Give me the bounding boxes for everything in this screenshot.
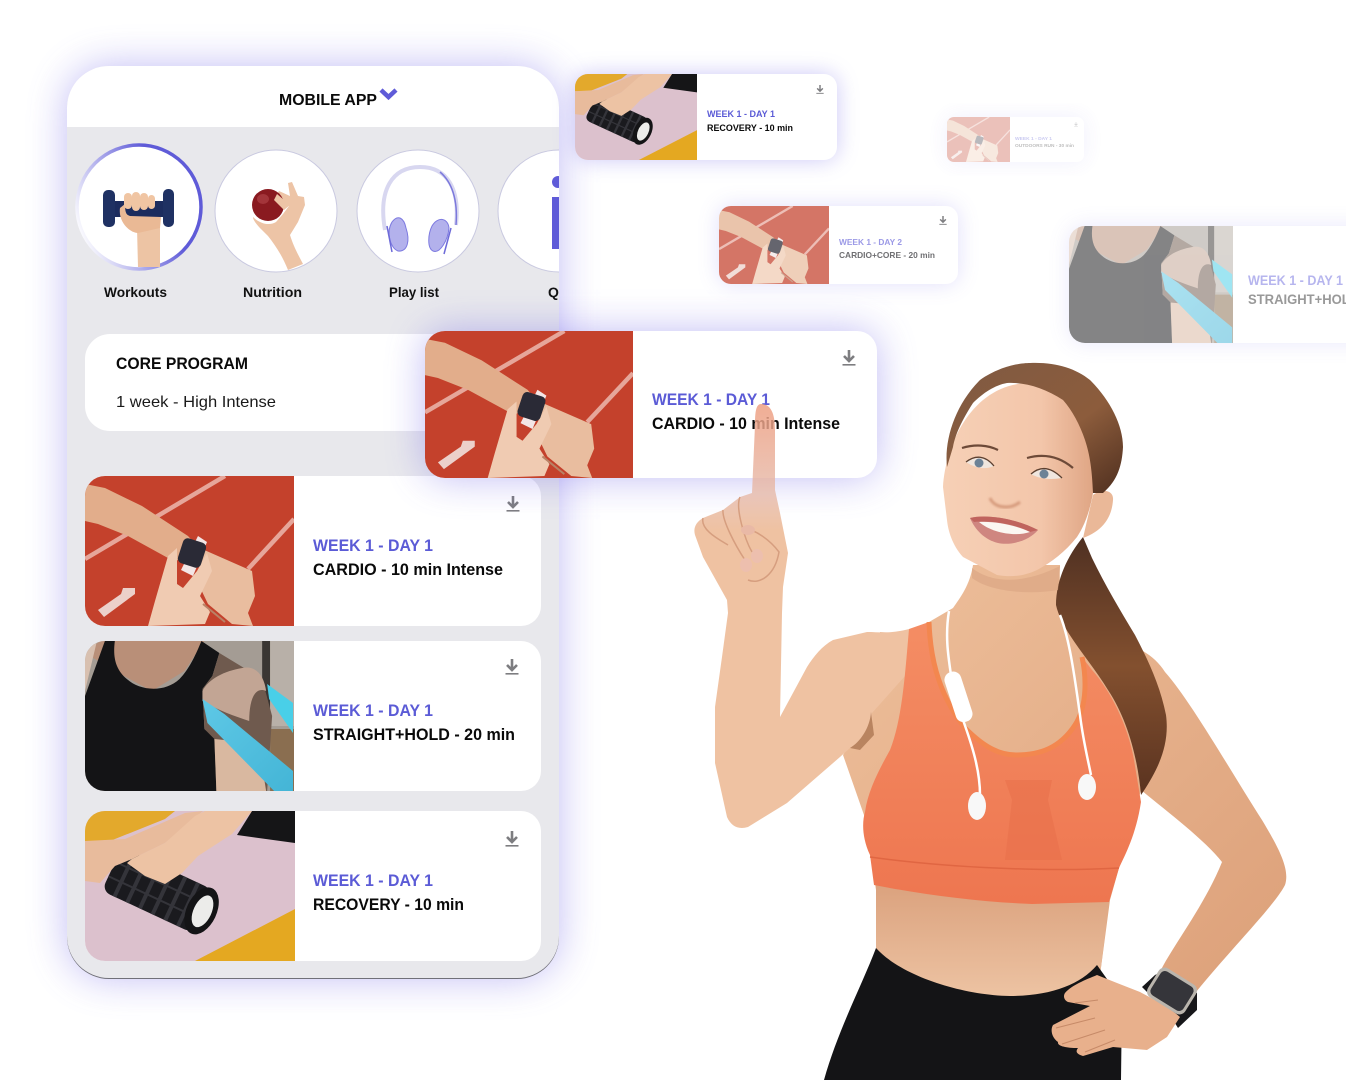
smartwatch band [1142,970,1197,1028]
ponytail [1056,537,1167,795]
label: Q cut off: Q [548,284,559,300]
floating card: outdoors run faint [947,117,1084,162]
eyebrows [962,446,1073,468]
nose [990,498,1020,507]
panel: core program: CORE PROGRAM [116,354,248,373]
card: cardio: CARDIO - 10 min Intense [313,561,503,579]
earphone cable and buds [942,611,1096,820]
black shorts [824,948,1122,1080]
floating card: straight hold faded [1069,226,1346,343]
eyes [966,457,1062,479]
app header [67,66,559,127]
floating card: recovery small: WEEK 1 - DAY 1 [707,109,775,119]
card: straight hold [85,641,541,791]
floating card: cardio core [719,206,958,284]
head and face [943,383,1094,576]
floating card: recovery small: RECOVERY - 10 min [707,123,793,133]
floating card: cardio core: WEEK 1 - DAY 2 [839,237,902,247]
bra [863,622,1141,904]
panel: core program: 1 week - High Intense [116,394,276,411]
neck and body skin [843,565,1286,1010]
floating card: cardio core: CARDIO+CORE - 20 min [839,250,935,260]
label: Nutrition: Nutrition [243,284,302,300]
card: recovery: WEEK 1 - DAY 1 [313,872,433,890]
card: recovery [85,811,541,961]
raised arm and hand [694,404,909,828]
card: recovery: RECOVERY - 10 min [313,896,464,914]
hand details [703,497,779,581]
floating card: cardio main: WEEK 1 - DAY 1 [652,391,770,409]
icon: play list headphones [357,150,479,272]
card: cardio [85,476,541,626]
icon: nutrition apple [215,150,337,272]
panel: mobile app glow [67,66,559,978]
floating card: cardio main: CARDIO - 10 min Intense [652,415,840,433]
icon: fourth circle info [498,150,559,272]
woman in orange sports bra [694,363,1286,1080]
app header: MOBILE APP [279,92,377,109]
smartwatch face [1144,965,1200,1017]
armpit shadow [850,712,874,750]
mouth smile [970,516,1038,544]
midriff [876,885,1110,1010]
ear [1083,491,1113,538]
hand on hip [1052,975,1180,1056]
floating card: outdoors run faint: WEEK 1 - DAY 1 [1015,136,1053,141]
card: straight hold: WEEK 1 - DAY 1 [313,702,433,720]
label: Play list: Play list [389,284,439,300]
label: Workouts: Workouts [104,284,167,300]
neck shadow under jaw [972,566,1060,592]
panel: core program [85,334,434,431]
floating card: outdoors run faint: OUTDOORS RUN - 30 min [1015,143,1074,148]
floating card: cardio main [425,331,877,478]
icon: workouts dumbbell [77,145,201,269]
floating card: recovery small [575,74,837,160]
panel: mobile app phone screen [67,66,559,979]
card: cardio: WEEK 1 - DAY 1 [313,537,433,555]
card: straight hold: STRAIGHT+HOLD - 20 min [313,726,515,744]
hair [947,363,1123,493]
